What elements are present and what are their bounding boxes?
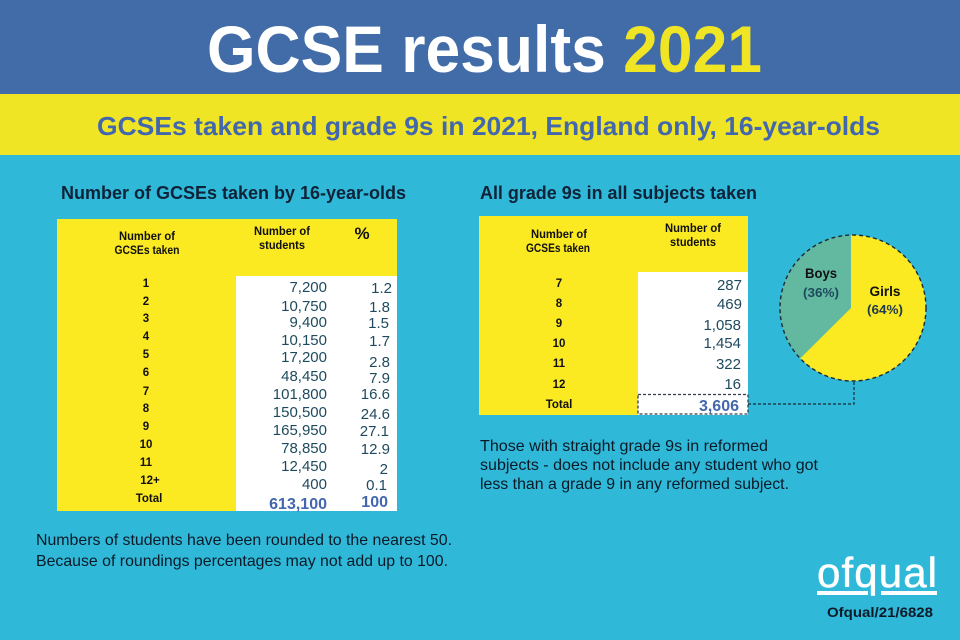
table: GCSEs taken by 16-year-olds: 10,150: [281, 332, 327, 349]
table: GCSEs taken by 16-year-olds: 3: [143, 313, 149, 325]
table: GCSEs taken by 16-year-olds: 8: [143, 403, 150, 415]
table: GCSEs taken by 16-year-olds: 165,950: [273, 422, 327, 439]
table: GCSEs taken by 16-year-olds: 5: [143, 349, 150, 361]
title banner: [0, 0, 960, 94]
table: all grade 9s: [479, 216, 748, 415]
table: all grade 9s: GCSEs taken: [526, 241, 590, 255]
table: GCSEs taken by 16-year-olds: 1.2: [371, 280, 392, 297]
table: GCSEs taken by 16-year-olds: 1: [143, 278, 150, 290]
table: GCSEs taken by 16-year-olds: 9,400: [289, 314, 327, 331]
table: all grade 9s: 1,454: [703, 335, 741, 352]
table: GCSEs taken by 16-year-olds: 2.8: [369, 354, 390, 371]
table: GCSEs taken by 16-year-olds: 1.7: [369, 333, 390, 350]
logo: ofqual: ofqual: [817, 549, 937, 596]
table: GCSEs taken by 16-year-olds: 101,800: [273, 386, 327, 403]
note: rounding: Numbers of students have been rounded to the nearest 50.: [36, 532, 452, 549]
table: GCSEs taken by 16-year-olds: 17,200: [281, 349, 327, 366]
table: GCSEs taken by 16-year-olds: 2: [380, 461, 388, 478]
table: all grade 9s: 7: [556, 278, 562, 290]
table: all grade 9s: Total: [546, 399, 572, 411]
pie chart: boys and girls: Boys: [805, 265, 837, 281]
table: GCSEs taken by 16-year-olds: 6: [143, 367, 149, 379]
heading: number of GCSEs taken: Number of GCSEs taken by 16-year-olds: [61, 183, 406, 203]
heading: all grade 9s: All grade 9s in all subjects taken: [480, 183, 757, 203]
table: GCSEs taken by 16-year-olds: 27.1: [360, 423, 389, 440]
table: GCSEs taken by 16-year-olds: 12.9: [361, 441, 390, 458]
table: GCSEs taken by 16-year-olds: 1.8: [369, 299, 390, 316]
table: all grade 9s: 469: [717, 296, 742, 313]
connector: total to pie: [748, 381, 854, 404]
note: straight grade 9s: subjects - does not include any student who got: [480, 457, 819, 474]
table: GCSEs taken by 16-year-olds: 12,450: [281, 458, 327, 475]
table: GCSEs taken by 16-year-olds: GCSEs taken: [114, 243, 180, 257]
table: all grade 9s: Number of: [531, 227, 588, 241]
table: GCSEs taken by 16-year-olds: 150,500: [273, 404, 327, 421]
table: all grade 9s: 9: [556, 318, 562, 330]
publication reference: Ofqual/21/6828: [827, 604, 933, 620]
table: all grade 9s: 3,606: [699, 398, 739, 415]
table: GCSEs taken by 16-year-olds: 1.5: [368, 315, 389, 332]
subtitle band: GCSEs taken and grade 9s in 2021, England only, 16-year-olds: [97, 111, 880, 141]
table: GCSEs taken by 16-year-olds: 16.6: [361, 386, 390, 403]
table: GCSEs taken by 16-year-olds: 10: [140, 439, 152, 451]
note: straight grade 9s: Those with straight grade 9s in reformed: [480, 438, 768, 455]
table: all grade 9s: 12: [553, 379, 565, 391]
note: straight grade 9s: [480, 438, 819, 493]
table: GCSEs taken by 16-year-olds: 10,750: [281, 298, 327, 315]
table: GCSEs taken by 16-year-olds: 2: [143, 296, 149, 308]
table: all grade 9s: students: [670, 235, 716, 249]
table: GCSEs taken by 16-year-olds: Total: [136, 493, 162, 505]
table: all grade 9s: 11: [553, 358, 566, 370]
table: GCSEs taken by 16-year-olds: 24.6: [361, 406, 390, 423]
table: GCSEs taken by 16-year-olds: 12+: [140, 475, 160, 487]
table: GCSEs taken by 16-year-olds: Number of: [254, 224, 311, 238]
pie chart: boys and girls: (64%): [867, 302, 903, 317]
table: GCSEs taken by 16-year-olds: 7,200: [289, 279, 327, 296]
table: GCSEs taken by 16-year-olds: 9: [143, 421, 149, 433]
table: GCSEs taken by 16-year-olds: 100: [361, 494, 388, 511]
note: straight grade 9s: less than a grade 9 in any reformed subject.: [480, 476, 789, 493]
table: all grade 9s: Number of: [665, 221, 722, 235]
table: all grade 9s: 322: [716, 356, 741, 373]
table: all grade 9s: 16: [724, 376, 741, 393]
table: GCSEs taken by 16-year-olds: 613,100: [269, 496, 327, 513]
table: GCSEs taken by 16-year-olds: 7: [143, 386, 149, 398]
table: GCSEs taken by 16-year-olds: 78,850: [281, 440, 327, 457]
table: GCSEs taken by 16-year-olds: 0.1: [366, 477, 387, 494]
pie chart: boys and girls: Girls: [870, 283, 901, 299]
table: GCSEs taken by 16-year-olds: 48,450: [281, 368, 327, 385]
table: GCSEs taken by 16-year-olds: 7.9: [369, 370, 390, 387]
table: GCSEs taken by 16-year-olds: Number of: [119, 229, 176, 243]
note: rounding: [36, 532, 452, 570]
table: GCSEs taken by 16-year-olds: %: [354, 224, 370, 243]
table: GCSEs taken by 16-year-olds: 400: [302, 476, 327, 493]
table: all grade 9s: 10: [553, 338, 565, 350]
pie chart: boys and girls: (36%): [803, 285, 839, 300]
table: all grade 9s: 1,058: [703, 317, 741, 334]
pie chart: boys and girls: [779, 234, 927, 382]
table: all grade 9s: 287: [717, 277, 742, 294]
table: GCSEs taken by 16-year-olds: [57, 219, 397, 513]
table: GCSEs taken by 16-year-olds: 11: [140, 457, 153, 469]
title banner: GCSE results 2021: [207, 12, 762, 86]
table: all grade 9s: 8: [556, 298, 563, 310]
note: rounding: Because of roundings percentages may not add up to 100.: [36, 553, 448, 570]
subtitle band: [0, 94, 960, 155]
table: GCSEs taken by 16-year-olds: 4: [143, 331, 150, 343]
table: GCSEs taken by 16-year-olds: students: [259, 238, 305, 252]
